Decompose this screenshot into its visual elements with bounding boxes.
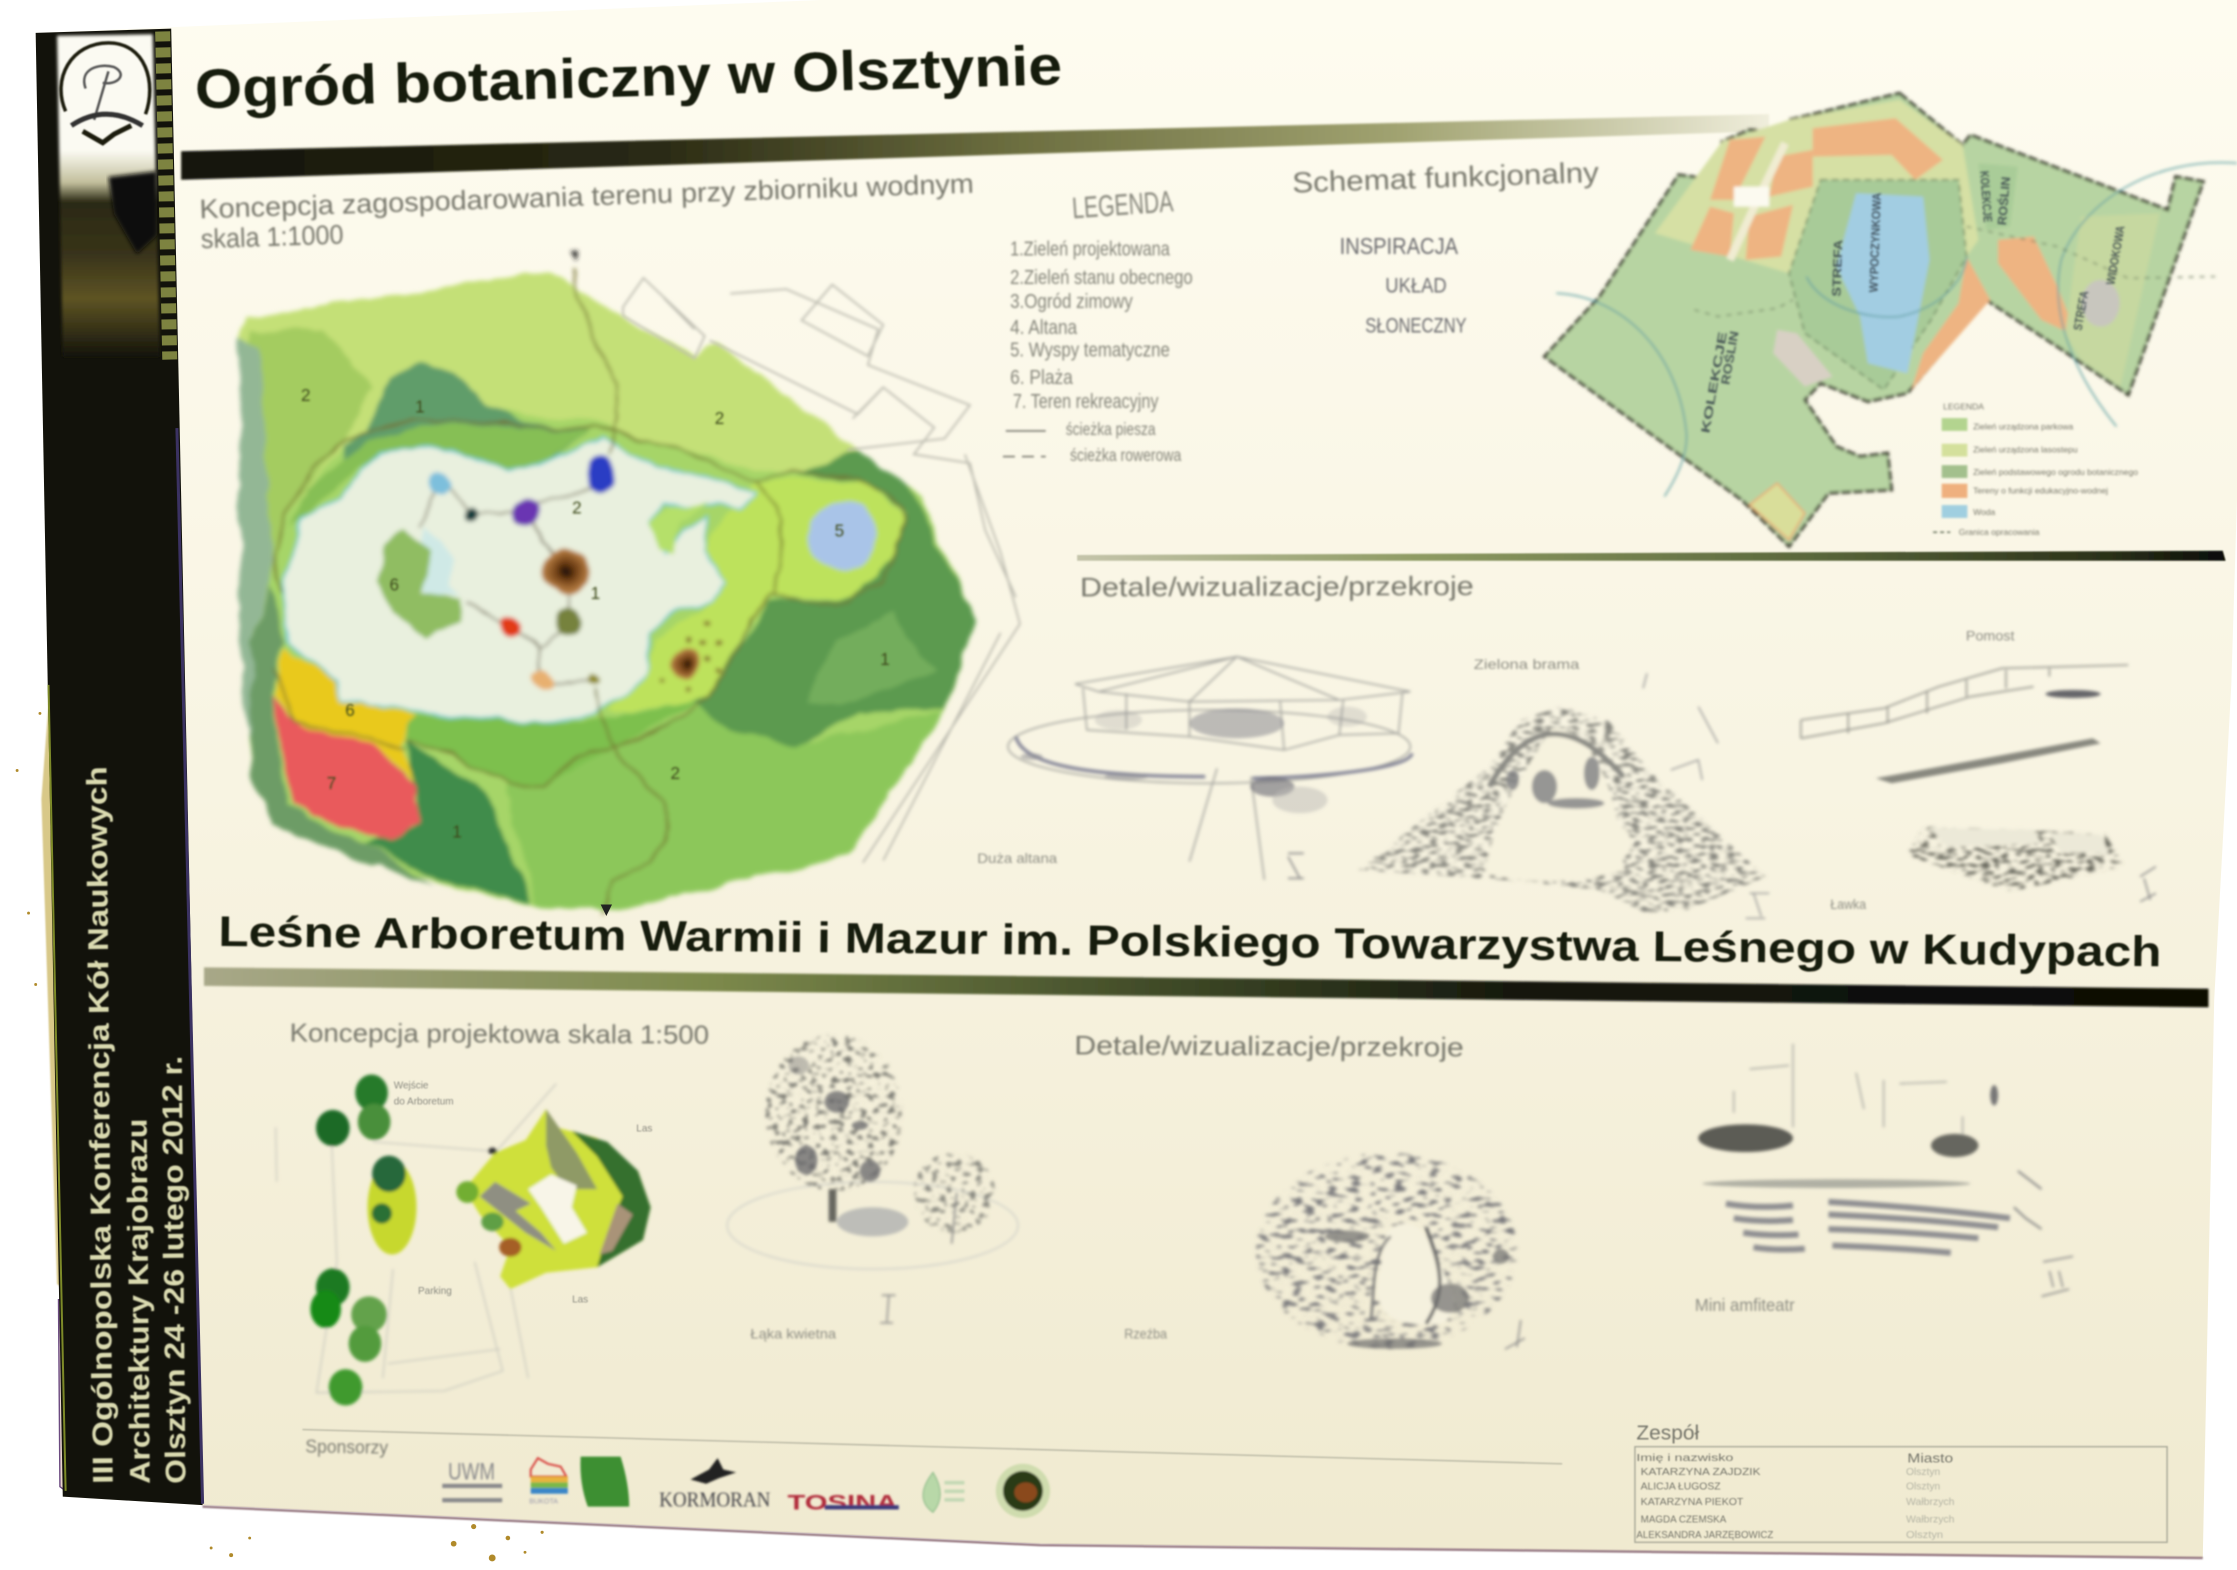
sketch captions upper: Duża altana — [977, 851, 1057, 867]
route markers — [568, 250, 576, 259]
plan captions: Wejście — [394, 1081, 429, 1092]
water — [1836, 193, 1929, 373]
logo: round emblem — [996, 1464, 1050, 1518]
sketch captions lower: Rzeźba — [1124, 1326, 1167, 1342]
plan zone numbers: 7 — [327, 774, 336, 793]
scheme zone labels: ROŚLIN — [1994, 176, 2013, 226]
scheme zone labels: WYPOCZYNKOWA — [1866, 192, 1884, 293]
logo: Kormoran: KORMORAN — [659, 1488, 770, 1512]
logo: UWM — [442, 1458, 502, 1502]
route marker south — [601, 905, 612, 916]
scheme zone labels — [1698, 170, 2128, 434]
terrace garden — [464, 1109, 651, 1289]
yellow lawn — [274, 648, 416, 782]
plan pencil lines — [276, 1084, 556, 1393]
central green zone — [1789, 180, 1967, 390]
plan zone numbers: 1 — [452, 823, 462, 842]
arch band — [1489, 734, 1623, 787]
legend — [1003, 185, 1193, 465]
sketch: sculpture and amphitheatre — [1256, 1044, 2073, 1349]
south-west grey green — [251, 584, 434, 887]
photo tree silhouettes — [108, 171, 157, 254]
team table: KATARZYNA ZAJDZIK — [1641, 1467, 1761, 1478]
gate interior boulder — [1497, 812, 1631, 875]
pink board corner — [58, 1300, 71, 1495]
team table: ALEKSANDRA JARZĘBOWICZ — [1636, 1530, 1773, 1541]
dark south wood — [363, 740, 531, 905]
lawn spit in lake — [649, 503, 710, 552]
legend: 5. Wyspy tematyczne — [1010, 340, 1170, 362]
heading: site concept: Koncepcja zagospodarowania terenu przy zbiorniku wodnym — [199, 168, 974, 224]
side band — [36, 29, 203, 1505]
scheme zone labels: WIDOKOWA — [2103, 224, 2128, 286]
logo: green shield — [580, 1457, 629, 1507]
numeral I — [880, 1295, 896, 1323]
orange east strip — [1998, 237, 2077, 337]
site outline — [1544, 93, 2203, 546]
background specks — [16, 712, 544, 1561]
thematic islands — [429, 456, 701, 687]
photo with logo — [57, 34, 160, 357]
sketch: flower meadow tree — [727, 1035, 1018, 1323]
heading: site concept: skala 1:1000 — [200, 219, 344, 254]
plan zone numbers: 2 — [671, 764, 680, 783]
logo: UWM: UWM — [448, 1458, 495, 1485]
dark hill north — [342, 363, 587, 477]
scheme legend: Granica opracowania — [1959, 527, 2040, 537]
scheme legend: Tereny o funkcji edukacyjno-wodnej — [1973, 486, 2108, 496]
olive band edge — [49, 685, 66, 1491]
plan captions — [394, 1081, 652, 1306]
light green ground — [240, 271, 975, 910]
conference text: Olsztyn 24 -26 lutego 2012 r. — [157, 1056, 192, 1484]
small tree — [913, 1153, 995, 1233]
logo: Tosina: TOSINA — [788, 1490, 897, 1514]
scheme zone labels: KOLEKCJE — [1698, 331, 1730, 434]
existing buildings sketch — [623, 278, 1020, 863]
plan zone numbers: 2 — [301, 386, 311, 405]
sculpture body — [1378, 1224, 1454, 1324]
brown footpaths — [272, 267, 904, 914]
scheme legend: LEGENDA — [1943, 402, 1984, 412]
board bottom edge — [203, 1507, 2203, 1558]
conference text: III Ogólnopolska Konferencja Kół Naukowych — [81, 766, 120, 1484]
sketch captions upper — [977, 629, 2014, 913]
team heading: Zespół — [1636, 1423, 1700, 1445]
scheme zone labels: STREFA — [2071, 290, 2091, 332]
team table: Imię i nazwisko — [1636, 1453, 1734, 1464]
divider bar middle — [1077, 551, 2226, 561]
orange north block — [1813, 118, 1943, 180]
title: Ogród botaniczny w Olsztynie — [194, 34, 1063, 120]
shore streak — [1876, 738, 2101, 783]
header bar — [181, 114, 1769, 180]
red recreation area — [271, 695, 419, 843]
numeral III — [2140, 867, 2156, 902]
heading: project concept: Koncepcja projektowa skala 1:500 — [290, 1020, 709, 1050]
team table: Olsztyn — [1906, 1467, 1940, 1478]
plan captions: Las — [572, 1295, 588, 1306]
sketch captions upper: Zielona brama — [1474, 657, 1579, 673]
film perforations — [163, 31, 170, 360]
east wood highlight — [807, 611, 934, 704]
sketch: bench — [1907, 827, 2124, 892]
beach island — [376, 530, 460, 637]
logo: Kormoran — [659, 1458, 770, 1512]
inspiration note: INSPIRACJA — [1340, 233, 1459, 259]
watercolor site plan — [239, 250, 975, 914]
twigs — [1643, 673, 1769, 918]
teal arcs — [1556, 163, 2237, 497]
logo — [61, 43, 150, 143]
entrance plan — [276, 1075, 651, 1405]
paving area — [1773, 330, 1832, 387]
team table: Wałbrzych — [1906, 1514, 1955, 1525]
purple band edge — [177, 428, 203, 1504]
heading: details upper: Detale/wizualizacje/przekroje — [1080, 571, 1474, 602]
scheme zone labels: KOLEKCJE — [1977, 170, 1995, 223]
logo: region: BUKOTA — [529, 1498, 558, 1506]
belt south of lake — [404, 700, 710, 785]
plan zone numbers: 6 — [389, 576, 399, 595]
lower green ground — [506, 704, 944, 910]
dark east wood — [694, 450, 975, 747]
legend: ścieżka piesza — [1066, 420, 1156, 439]
scheme legend: Zieleń urządzona parkowa — [1973, 421, 2074, 431]
plan zone numbers — [301, 386, 890, 842]
functional scheme map — [1544, 93, 2237, 546]
plan captions: Las — [636, 1123, 652, 1134]
west mid green — [251, 329, 373, 686]
scheme legend: Zieleń podstawowego ogrodu botanicznego — [1973, 467, 2138, 477]
shallow water — [419, 526, 460, 597]
sketch captions lower — [750, 1296, 1795, 1342]
ground ellipse — [727, 1182, 1018, 1269]
team table: KATARZYNA PIEKOT — [1641, 1497, 1743, 1508]
legend: 2.Zieleń stanu obecnego — [1010, 267, 1193, 289]
north belt — [291, 423, 587, 526]
grey west strip — [239, 338, 271, 767]
heading: functional scheme: Schemat funkcjonalny — [1292, 157, 1600, 200]
team table: MAGDA CZEMSKA — [1641, 1514, 1727, 1525]
inspiration note: SŁONECZNY — [1365, 313, 1467, 337]
sponsor logos — [442, 1457, 1050, 1518]
lake — [284, 439, 753, 722]
conference text: Architektury Krajobrazu — [122, 1119, 157, 1484]
plan zone numbers: 1 — [591, 584, 600, 603]
pavilion dots — [659, 621, 723, 691]
legend: 3.Ogród zimowy — [1010, 291, 1133, 313]
sponsors rule — [302, 1430, 1562, 1464]
amphitheatre seats — [1726, 1202, 2010, 1253]
subtitle: Leśne Arboretum Warmii i Mazur im. Polskiego Towarzystwa Leśnego w Kudypach — [218, 908, 2162, 976]
conference text — [81, 766, 192, 1484]
team table: Olsztyn — [1906, 1530, 1943, 1541]
east bay lawn — [608, 477, 904, 713]
team table: Wałbrzych — [1906, 1497, 1955, 1508]
plan captions: Parking — [418, 1286, 452, 1297]
lower bar — [204, 967, 2208, 1007]
legend: 1.Zieleń projektowana — [1010, 238, 1171, 260]
white axis — [1730, 143, 1785, 260]
sketch: gazebo — [1008, 657, 1412, 880]
logo: leaf — [923, 1472, 964, 1512]
dashed route — [1694, 227, 2215, 317]
heading: details lower: Detale/wizualizacje/przekroje — [1074, 1030, 1464, 1062]
amphitheatre trees — [1698, 1124, 1793, 1152]
south-east peninsula — [628, 615, 725, 707]
plan zone numbers: 1 — [880, 650, 890, 669]
sponsors label: Sponsorzy — [305, 1435, 389, 1458]
team table — [1635, 1423, 2167, 1542]
sketch: boardwalk — [1801, 665, 2128, 738]
numeral II — [1505, 1320, 1525, 1349]
sketch captions upper: Pomost — [1966, 629, 2014, 645]
legend title: LEGENDA — [1071, 185, 1174, 225]
legend: 7. Teren rekreacyjny — [1013, 391, 1158, 413]
gate plants — [1507, 757, 1604, 809]
plan zone numbers: 1 — [415, 397, 425, 416]
scheme zone labels: ROŚLIN — [1717, 330, 1741, 386]
plan zone numbers: 6 — [345, 701, 355, 720]
team table: Miasto — [1907, 1450, 1953, 1465]
heading: site concept — [199, 168, 974, 254]
team table: Olsztyn — [1906, 1481, 1940, 1492]
legend: 4. Altana — [1010, 317, 1078, 339]
scheme legend: Woda — [1973, 507, 1995, 517]
stone walkways — [419, 486, 600, 682]
sculpture foliage — [1256, 1153, 1517, 1349]
plan zone numbers: 2 — [572, 499, 582, 518]
logo: region — [529, 1458, 568, 1506]
pencil sketches upper — [1008, 657, 2156, 918]
left edge strip — [41, 685, 66, 1291]
scheme legend: Zieleń urządzona lasostepu — [1973, 444, 2078, 454]
upper pale green — [240, 271, 858, 686]
plan zone numbers: 2 — [715, 409, 724, 428]
pond — [808, 503, 877, 570]
team table: ALICJA ŁUGOSZ — [1641, 1481, 1721, 1492]
sketch captions lower: Łąka kwietna — [750, 1326, 836, 1342]
sketch: green gate mound — [1359, 707, 1765, 913]
plan captions: do Arboretum — [394, 1096, 454, 1107]
gazebo shading — [1021, 707, 1367, 813]
numeral III — [2041, 1256, 2073, 1296]
orange west blocks — [1710, 137, 1765, 200]
legend: ścieżka rowerowa — [1070, 446, 1182, 465]
inspiration note: UKŁAD — [1385, 274, 1447, 298]
sketch captions lower: Mini amfiteatr — [1695, 1296, 1795, 1315]
inspiration note — [1340, 233, 1467, 337]
crown — [765, 1035, 903, 1191]
scheme zone labels: STREFA — [1829, 239, 1845, 297]
pale top strip — [1655, 100, 1978, 273]
sketch captions upper: Ławka — [1830, 897, 1866, 913]
east lobes — [2065, 213, 2160, 387]
legend: 6. Plaża — [1010, 367, 1074, 389]
plan zone numbers: 5 — [835, 521, 844, 540]
trees — [310, 1075, 416, 1405]
bottom corner plot — [1750, 483, 1805, 540]
scheme legend — [1933, 402, 2138, 537]
dark band — [36, 29, 203, 1505]
trunk — [829, 1189, 836, 1222]
